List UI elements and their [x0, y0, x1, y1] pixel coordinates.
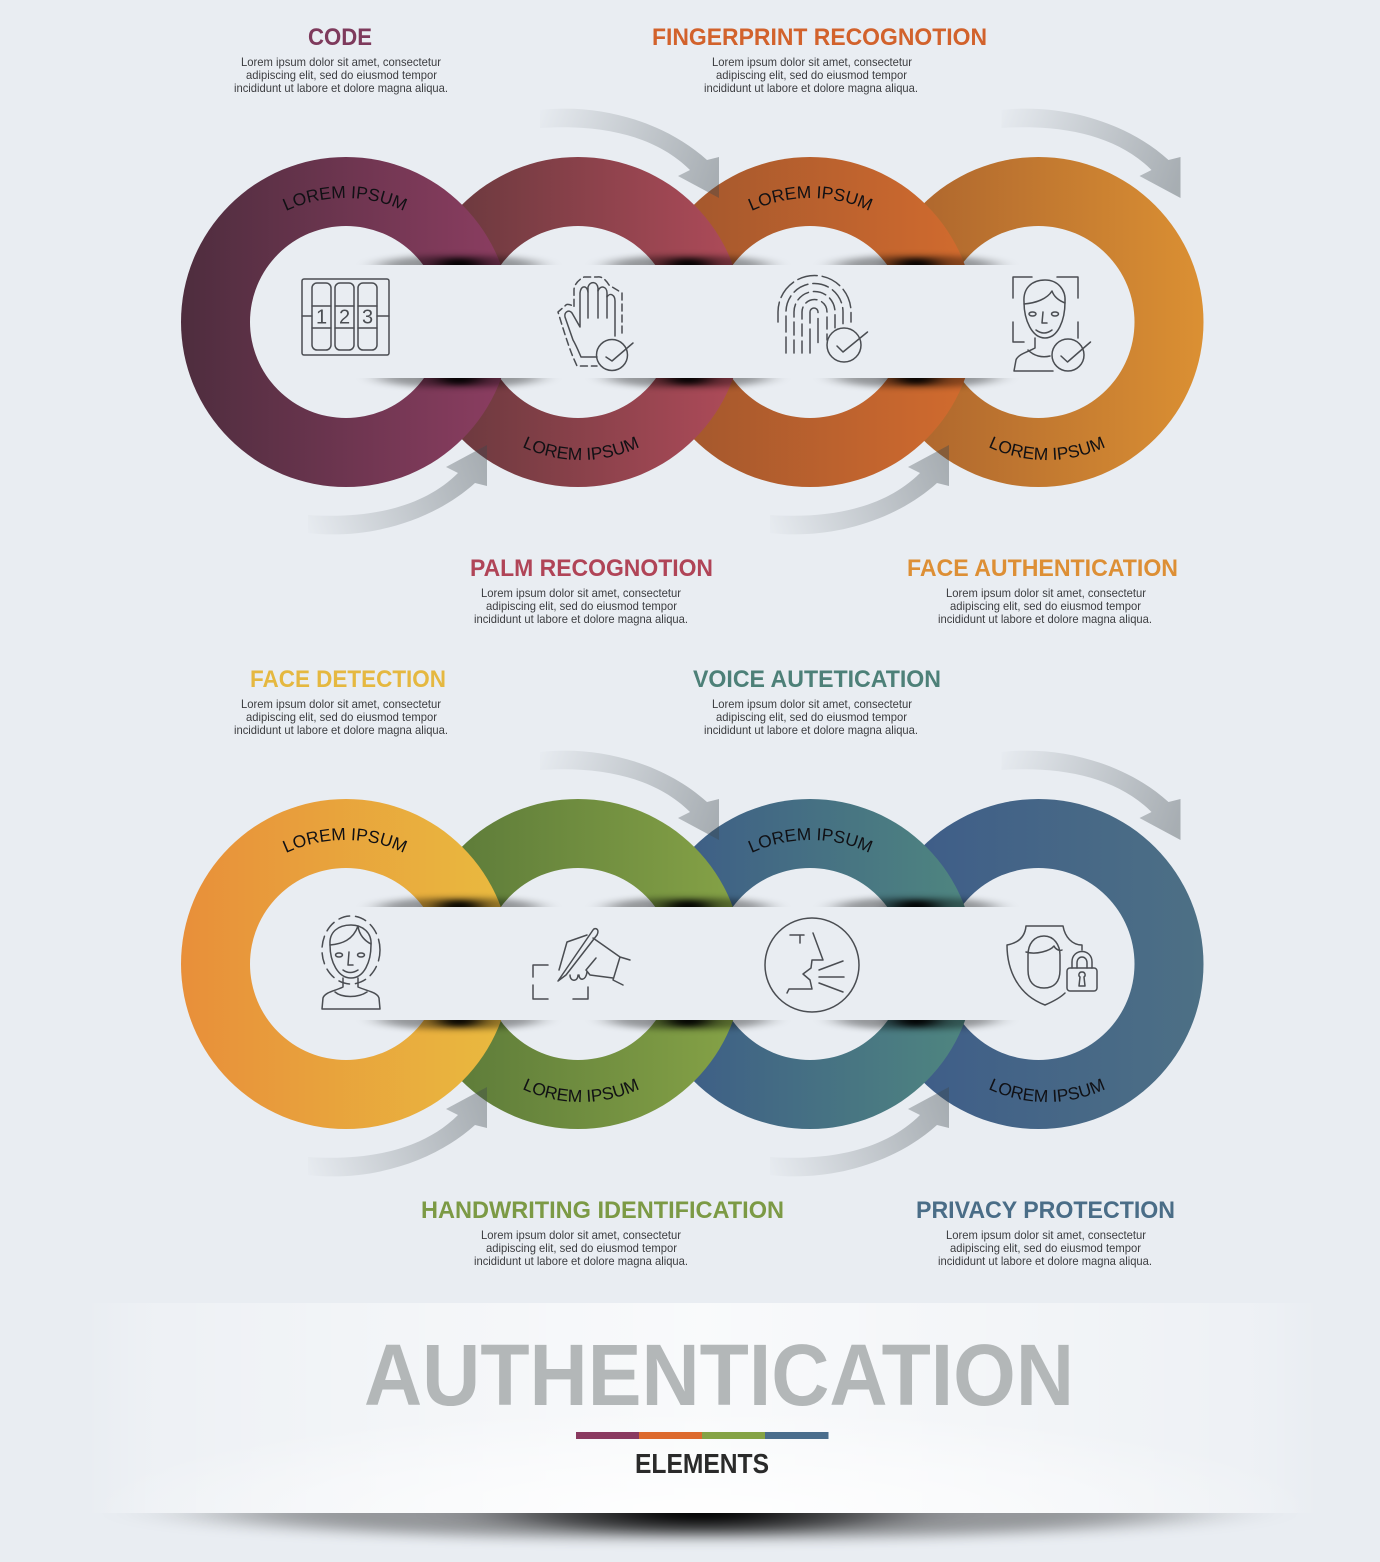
icon: voice: [765, 918, 859, 1012]
heading group: palm recognition: [470, 555, 713, 626]
heading group: face authentication: Lorem ipsum dolor sit amet, consectetur: [946, 586, 1146, 600]
footer panel shadow: [154, 1513, 1246, 1546]
ring 4: face authentication: [924, 157, 1204, 487]
subtitle: ELEMENTS: [635, 1448, 769, 1479]
heading group: voice authentication: Lorem ipsum dolor sit amet, consectetur: [712, 697, 912, 711]
arrow: handwriting to voice: [540, 751, 719, 840]
heading group: handwriting identification: Lorem ipsum dolor sit amet, consectetur: [481, 1228, 681, 1242]
heading group: privacy protection: adipiscing elit, sed do eiusmod tempor: [950, 1241, 1141, 1255]
heading group: code: [234, 24, 448, 95]
heading group: handwriting identification: adipiscing elit, sed do eiusmod tempor: [486, 1241, 677, 1255]
ring 8: privacy protection: [924, 799, 1204, 1129]
ring 2: palm recognition: LOREM IPSUM: [523, 436, 639, 460]
heading group: face detection: Lorem ipsum dolor sit amet, consectetur: [241, 697, 441, 711]
white band, row 1: [350, 265, 1012, 378]
heading group: face authentication: FACE AUTHENTICATION: [907, 555, 1178, 582]
ring 8: privacy protection: LOREM IPSUM: [989, 1078, 1105, 1102]
ring 6: handwriting identification: [462, 799, 734, 1129]
ring 5: face detection: LOREM IPSUM: [282, 828, 408, 852]
heading group: palm recognition: incididunt ut labore et dolore magna aliqua.: [474, 612, 688, 626]
ring 3: fingerprint recognition: LOREM IPSUM: [748, 186, 873, 210]
icon: code lock: [302, 279, 389, 355]
arrow: fingerprint to face: [770, 445, 949, 534]
heading group: code: CODE: [308, 24, 372, 51]
heading group: face authentication: incididunt ut labore et dolore magna aliqua.: [938, 612, 1152, 626]
heading group: fingerprint recognition: adipiscing elit, sed do eiusmod tempor: [716, 68, 907, 82]
arrow: palm to fingerprint: [540, 109, 719, 198]
footer panel: [85, 1303, 1320, 1513]
arrow: face onward: [1002, 109, 1180, 198]
arrow: privacy onward: [1002, 751, 1180, 840]
band shadows, row 1: [379, 255, 996, 388]
ring 1: code: LOREM IPSUM: [282, 186, 408, 210]
heading group: privacy protection: [916, 1197, 1175, 1268]
heading group: handwriting identification: [421, 1197, 784, 1268]
icon: code lock: 2: [339, 306, 350, 328]
ring 2: palm recognition: [462, 157, 734, 487]
heading group: voice authentication: adipiscing elit, sed do eiusmod tempor: [716, 710, 907, 724]
heading group: voice authentication: VOICE AUTETICATION: [693, 666, 941, 693]
heading group: privacy protection: incididunt ut labore et dolore magna aliqua.: [938, 1254, 1152, 1268]
heading group: fingerprint recognition: [652, 24, 987, 95]
heading group: fingerprint recognition: FINGERPRINT RECOGNOTION: [652, 24, 987, 51]
main title: AUTHENTICATION: [364, 1327, 1074, 1424]
heading group: privacy protection: PRIVACY PROTECTION: [916, 1197, 1175, 1224]
heading group: code: Lorem ipsum dolor sit amet, consectetur: [241, 55, 441, 69]
heading group: face authentication: [907, 555, 1178, 626]
ring 7: voice authentication: LOREM IPSUM: [748, 828, 873, 852]
heading group: face authentication: adipiscing elit, sed do eiusmod tempor: [950, 599, 1141, 613]
band shadows, row 2: [379, 897, 996, 1030]
heading group: voice authentication: [693, 666, 941, 737]
arrow: face detection to handwriting: [308, 1087, 487, 1176]
icon: face detection: [322, 916, 380, 1009]
heading group: palm recognition: PALM RECOGNOTION: [470, 555, 713, 582]
icon: code lock: 3: [362, 306, 373, 328]
icon: code lock: 1: [316, 306, 327, 328]
heading group: fingerprint recognition: Lorem ipsum dolor sit amet, consectetur: [712, 55, 912, 69]
heading group: voice authentication: incididunt ut labore et dolore magna aliqua.: [704, 723, 918, 737]
ring 4: face authentication: LOREM IPSUM: [989, 436, 1105, 460]
ring 3: fingerprint recognition: [694, 157, 966, 487]
arrow: code to palm: [308, 445, 487, 534]
ring 7: voice authentication: [694, 799, 966, 1129]
ring 1: code: [181, 157, 502, 487]
icon: fingerprint: [778, 276, 868, 362]
heading group: code: adipiscing elit, sed do eiusmod tempor: [246, 68, 437, 82]
icon: handwriting: [533, 929, 630, 999]
heading group: face detection: adipiscing elit, sed do eiusmod tempor: [246, 710, 437, 724]
icon: privacy shield: [1007, 926, 1097, 1005]
heading group: face detection: FACE DETECTION: [250, 666, 446, 693]
heading group: face detection: [234, 666, 448, 737]
heading group: handwriting identification: HANDWRITING IDENTIFICATION: [421, 1197, 784, 1224]
colour bar: [576, 1432, 828, 1439]
icon: palm: [558, 277, 633, 370]
heading group: privacy protection: Lorem ipsum dolor sit amet, consectetur: [946, 1228, 1146, 1242]
heading group: face detection: incididunt ut labore et dolore magna aliqua.: [234, 723, 448, 737]
ring 6: handwriting identification: LOREM IPSUM: [523, 1078, 639, 1102]
infographic canvas: [154, 28, 1246, 1546]
heading group: palm recognition: adipiscing elit, sed do eiusmod tempor: [486, 599, 677, 613]
heading group: code: incididunt ut labore et dolore magna aliqua.: [234, 81, 448, 95]
heading group: palm recognition: Lorem ipsum dolor sit amet, consectetur: [481, 586, 681, 600]
white band, row 2: [350, 907, 1012, 1020]
arrow: voice to privacy: [770, 1087, 949, 1176]
ring 5: face detection: [181, 799, 502, 1129]
heading group: fingerprint recognition: incididunt ut labore et dolore magna aliqua.: [704, 81, 918, 95]
heading group: handwriting identification: incididunt ut labore et dolore magna aliqua.: [474, 1254, 688, 1268]
icon: face authentication: [1013, 277, 1090, 371]
